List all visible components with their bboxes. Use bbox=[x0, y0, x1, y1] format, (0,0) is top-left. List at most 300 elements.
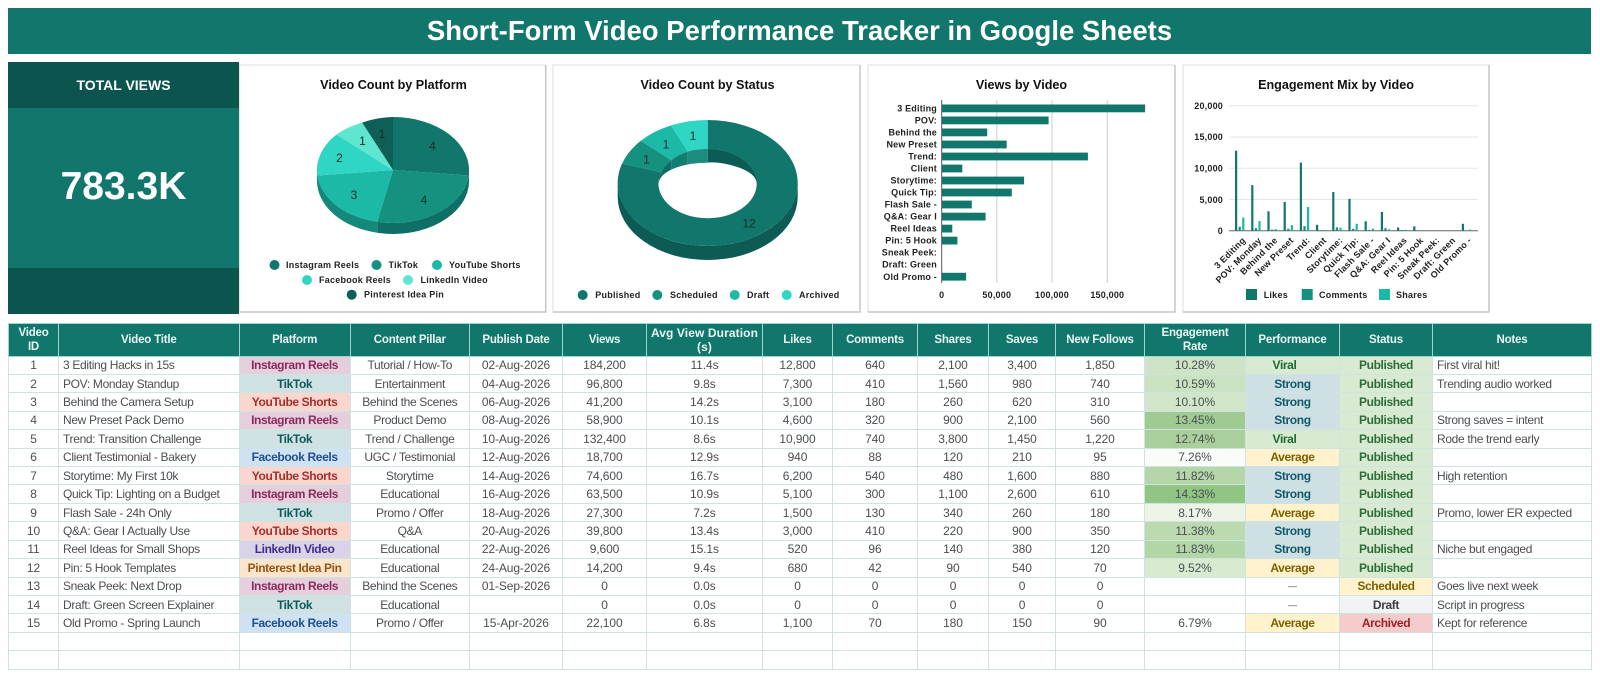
row 3: 06-Aug-2026 bbox=[482, 395, 550, 409]
row 2: 04-Aug-2026 bbox=[482, 377, 550, 391]
row 6: UGC / Testimonial bbox=[364, 450, 455, 464]
row 3: 260 bbox=[943, 395, 963, 409]
bar chart: views by video: Quick Tip: bbox=[891, 188, 937, 198]
row 7: Storytime: My First 10k bbox=[63, 469, 178, 483]
row 4: 13.45% bbox=[1175, 413, 1215, 427]
table header row: Publish Date bbox=[482, 334, 550, 346]
row 14: 14 bbox=[27, 598, 40, 612]
legend: status bbox=[578, 290, 840, 300]
table header row: Comments bbox=[846, 334, 904, 346]
row 15: 15 bbox=[27, 616, 40, 630]
row 2: Published bbox=[1359, 377, 1413, 391]
row 2: 980 bbox=[1012, 377, 1032, 391]
donut chart: status: 1 bbox=[663, 138, 670, 152]
pie chart: platform: 3 bbox=[351, 188, 358, 202]
row 5: 8.6s bbox=[693, 432, 716, 446]
row 10: 410 bbox=[865, 524, 885, 538]
row 12: 24-Aug-2026 bbox=[482, 561, 550, 575]
row 13: Scheduled bbox=[1357, 579, 1415, 593]
legend: engagement: Shares bbox=[1396, 290, 1428, 300]
row 2: 9.8s bbox=[693, 377, 716, 391]
row 6: 7.26% bbox=[1178, 450, 1212, 464]
row 10: Published bbox=[1359, 524, 1413, 538]
row 12: 12 bbox=[27, 561, 40, 575]
row 15: Average bbox=[1270, 616, 1315, 630]
bar chart: views by video: New Preset bbox=[886, 140, 937, 150]
row 3: Strong bbox=[1274, 395, 1311, 409]
row 9: Published bbox=[1359, 506, 1413, 520]
row 5: 1,220 bbox=[1085, 432, 1115, 446]
row 11: 11.83% bbox=[1175, 542, 1215, 556]
column chart: engagement mix: 3 Editing bbox=[1212, 235, 1247, 271]
row 13: 0 bbox=[794, 579, 801, 593]
row 6: 18,700 bbox=[586, 450, 623, 464]
donut chart: status bbox=[618, 120, 798, 260]
row 14: 0 bbox=[1097, 598, 1103, 612]
row 8: 2,600 bbox=[1007, 487, 1037, 501]
bar chart: views by video: Reel Ideas bbox=[890, 224, 937, 234]
legend: status: Scheduled bbox=[670, 290, 718, 300]
row 1: Tutorial / How-To bbox=[367, 358, 452, 372]
row 7: 540 bbox=[865, 469, 885, 483]
row 9: 9 bbox=[30, 506, 37, 520]
legend: platform: Facebook Reels bbox=[319, 275, 391, 285]
row 6: 88 bbox=[868, 450, 882, 464]
row 12: Published bbox=[1359, 561, 1413, 575]
table header row: Content Pillar bbox=[374, 334, 446, 346]
column chart: engagement mix: 20,000 bbox=[1194, 101, 1223, 111]
row 9: 7.2s bbox=[693, 506, 716, 520]
row 11: 120 bbox=[1090, 542, 1110, 556]
donut chart: status: 1 bbox=[690, 129, 697, 143]
row 6: Published bbox=[1359, 450, 1413, 464]
row 15: 1,100 bbox=[783, 616, 812, 630]
row 8: 14.33% bbox=[1175, 487, 1215, 501]
table header row: Platform bbox=[272, 334, 317, 346]
row 8: 8 bbox=[30, 487, 37, 501]
row 1: 3,400 bbox=[1007, 358, 1037, 372]
table header row: Video bbox=[18, 326, 49, 338]
chart title: engagement: Engagement Mix by Video bbox=[1258, 78, 1414, 92]
row 4: 08-Aug-2026 bbox=[482, 413, 550, 427]
table header row: Avg View Duration bbox=[651, 326, 758, 340]
row 14: 0 bbox=[601, 598, 608, 612]
row 5: 740 bbox=[865, 432, 885, 446]
legend: engagement: Likes bbox=[1264, 290, 1288, 300]
legend: platform: Instagram Reels bbox=[286, 260, 359, 270]
legend: engagement bbox=[1246, 289, 1428, 300]
row 1: 1 bbox=[30, 358, 37, 372]
row 10: Strong bbox=[1274, 524, 1311, 538]
row 9 bbox=[30, 504, 1572, 521]
row 7: 7 bbox=[30, 469, 37, 483]
row 7: 880 bbox=[1090, 469, 1110, 483]
donut chart: status: 12 bbox=[742, 216, 756, 230]
row 12: 90 bbox=[946, 561, 960, 575]
legend: status: Draft bbox=[747, 290, 769, 300]
row 11: Strong bbox=[1274, 542, 1311, 556]
row 4: Strong bbox=[1274, 413, 1311, 427]
panel: video count by status bbox=[552, 64, 861, 313]
row 14: Script in progress bbox=[1437, 598, 1524, 612]
row 15: Archived bbox=[1362, 616, 1410, 630]
legend: platform: LinkedIn Video bbox=[420, 275, 488, 285]
row 8: Educational bbox=[380, 487, 439, 501]
bar chart: views by video: 3 Editing bbox=[897, 104, 937, 114]
row 9: TikTok bbox=[277, 506, 312, 520]
row 15: 70 bbox=[868, 616, 882, 630]
row 10: Q&A bbox=[398, 524, 422, 538]
row 3: 310 bbox=[1090, 395, 1110, 409]
row 5: 10,900 bbox=[779, 432, 816, 446]
column chart: engagement mix: POV: Monday bbox=[1214, 235, 1263, 285]
row 2: 96,800 bbox=[586, 377, 623, 391]
row 8: Quick Tip: Lighting on a Budget bbox=[63, 487, 220, 501]
table header row: Performance bbox=[1258, 334, 1327, 346]
row 11: Reel Ideas for Small Shops bbox=[63, 542, 200, 556]
bar chart: views by video: 50,000 bbox=[982, 290, 1011, 300]
column chart: engagement mix: New Preset bbox=[1253, 235, 1295, 278]
pie chart: platform: 4 bbox=[421, 193, 428, 207]
legend: platform: YouTube Shorts bbox=[449, 260, 521, 270]
row 1 bbox=[30, 357, 1500, 374]
row 8: Strong bbox=[1274, 487, 1311, 501]
panel: total views KPI bbox=[8, 62, 239, 314]
row 7: Strong bbox=[1274, 469, 1311, 483]
row 15: Kept for reference bbox=[1437, 616, 1527, 630]
row 7: 74,600 bbox=[586, 469, 623, 483]
row 10: 220 bbox=[943, 524, 963, 538]
row 6: Facebook Reels bbox=[252, 450, 338, 464]
column chart: engagement mix: Old Promo - bbox=[1428, 235, 1473, 280]
column chart: engagement mix: 15,000 bbox=[1194, 132, 1223, 142]
row 9: Flash Sale - 24h Only bbox=[63, 506, 171, 520]
row 5: 10-Aug-2026 bbox=[482, 432, 550, 446]
row 13: 0 bbox=[1097, 579, 1103, 593]
row 3: Behind the Camera Setup bbox=[63, 395, 194, 409]
row 13: 01-Sep-2026 bbox=[482, 579, 550, 593]
row 13: Instagram Reels bbox=[251, 579, 338, 593]
row 4: 560 bbox=[1090, 413, 1110, 427]
row 3: YouTube Shorts bbox=[252, 395, 337, 409]
row 9: Average bbox=[1270, 506, 1315, 520]
row 3: 10.10% bbox=[1175, 395, 1215, 409]
row 7: High retention bbox=[1437, 469, 1507, 483]
row 6: Average bbox=[1270, 450, 1315, 464]
row 4: Published bbox=[1359, 413, 1413, 427]
row 10: 13.4s bbox=[690, 524, 719, 538]
bar chart: views by video: Draft: Green bbox=[882, 260, 937, 270]
row 5 bbox=[30, 430, 1540, 448]
row 9: 1,500 bbox=[783, 506, 812, 520]
row 6: 940 bbox=[788, 450, 807, 464]
bar chart: views by video: Behind the bbox=[888, 128, 937, 138]
bar chart: views by video: 0 bbox=[939, 290, 944, 300]
bar chart: views by video: Storytime: bbox=[890, 176, 937, 186]
column chart: engagement mix bbox=[1194, 101, 1478, 285]
row 12: 9.52% bbox=[1178, 561, 1212, 575]
row 13 bbox=[27, 578, 1538, 595]
row 9: 180 bbox=[1090, 506, 1110, 520]
bar chart: views by video: Pin: 5 Hook bbox=[885, 236, 938, 246]
bar chart: views by video: Q&A: Gear I bbox=[884, 212, 937, 222]
table header row: Video Title bbox=[121, 334, 177, 346]
row 5: TikTok bbox=[277, 432, 312, 446]
row 9: Promo / Offer bbox=[376, 506, 444, 520]
row 7: 6,200 bbox=[783, 469, 812, 483]
row 1: 02-Aug-2026 bbox=[482, 358, 550, 372]
row 7 bbox=[30, 467, 1507, 484]
column chart: engagement mix: Draft: Green bbox=[1412, 235, 1457, 281]
row 13: Sneak Peek: Next Drop bbox=[63, 579, 181, 593]
row 5: 5 bbox=[30, 432, 37, 446]
empty row 16 bbox=[8, 632, 1591, 651]
row 1: Instagram Reels bbox=[251, 358, 338, 372]
row 13: — bbox=[1288, 581, 1297, 591]
column chart: engagement mix: Client bbox=[1303, 235, 1328, 261]
row 8 bbox=[30, 485, 1432, 503]
row 6: 210 bbox=[1012, 450, 1032, 464]
row 15: 15-Apr-2026 bbox=[483, 616, 549, 630]
row 6: 12-Aug-2026 bbox=[482, 450, 550, 464]
row 12: 70 bbox=[1093, 561, 1107, 575]
row 3: 3,100 bbox=[783, 395, 812, 409]
row 7: 14-Aug-2026 bbox=[482, 469, 550, 483]
row 8: Published bbox=[1359, 487, 1413, 501]
legend: status: Published bbox=[595, 290, 641, 300]
row 6: 120 bbox=[943, 450, 963, 464]
bar chart: views by video: Old Promo - bbox=[883, 272, 937, 282]
row 5: Trend: Transition Challenge bbox=[63, 432, 201, 446]
row 14: Educational bbox=[380, 598, 439, 612]
row 3: 41,200 bbox=[586, 395, 623, 409]
row 5: Published bbox=[1359, 432, 1413, 446]
KPI footer band bbox=[8, 268, 239, 314]
legend: platform: Pinterest Idea Pin bbox=[364, 290, 444, 300]
row 11: 380 bbox=[1012, 542, 1032, 556]
row 5: 12.74% bbox=[1175, 432, 1215, 446]
row 6 bbox=[30, 449, 1432, 466]
row 2: 7,300 bbox=[783, 377, 812, 391]
row 3: 180 bbox=[865, 395, 885, 409]
pie chart: platform: 2 bbox=[336, 151, 343, 165]
row 12: 42 bbox=[868, 561, 882, 575]
row 15: 150 bbox=[1012, 616, 1032, 630]
row 1: Viral bbox=[1273, 358, 1296, 372]
column chart: engagement mix: 10,000 bbox=[1194, 164, 1223, 174]
empty row 17 bbox=[8, 651, 1591, 669]
pie chart: platform: 1 bbox=[359, 134, 366, 148]
row 4: 58,900 bbox=[586, 413, 623, 427]
row 8: 1,100 bbox=[938, 487, 968, 501]
row 4: 2,100 bbox=[1007, 413, 1037, 427]
row 4: 4 bbox=[30, 413, 37, 427]
row 7: Published bbox=[1359, 469, 1413, 483]
row 12: Pinterest Idea Pin bbox=[248, 561, 342, 575]
row 14: Draft: Green Screen Explainer bbox=[63, 598, 214, 612]
row 2: POV: Monday Standup bbox=[63, 377, 179, 391]
row 5: 132,400 bbox=[583, 432, 626, 446]
row 13: 0 bbox=[1019, 579, 1025, 593]
row 9: 18-Aug-2026 bbox=[482, 506, 550, 520]
table header row: Views bbox=[589, 334, 620, 346]
legend: platform bbox=[270, 260, 521, 300]
KPI value: 783.3K bbox=[61, 165, 186, 208]
row 13: 13 bbox=[27, 579, 40, 593]
row 1: Published bbox=[1359, 358, 1413, 372]
title bbox=[8, 8, 1591, 54]
row 14: 0 bbox=[1019, 598, 1025, 612]
row 10: 11.38% bbox=[1175, 524, 1215, 538]
row 4: 320 bbox=[865, 413, 885, 427]
row 14: Draft bbox=[1373, 598, 1399, 612]
row 7: 1,600 bbox=[1007, 469, 1037, 483]
column chart: engagement mix: Reel Ideas bbox=[1369, 235, 1409, 275]
row 4: Instagram Reels bbox=[251, 413, 338, 427]
bar chart: views by video: Trend: bbox=[908, 152, 937, 162]
row 14: — bbox=[1288, 600, 1297, 610]
row 1: 1,850 bbox=[1085, 358, 1115, 372]
row 12 bbox=[27, 559, 1432, 577]
KPI label bbox=[8, 62, 239, 108]
row 12: Average bbox=[1270, 561, 1315, 575]
row 15: 6.8s bbox=[693, 616, 716, 630]
donut chart: status: 1 bbox=[643, 152, 650, 166]
row 13: 0 bbox=[872, 579, 878, 593]
row 3: Published bbox=[1359, 395, 1413, 409]
legend: status: Archived bbox=[799, 290, 840, 300]
row 3: Behind the Scenes bbox=[362, 395, 457, 409]
row 10: 900 bbox=[1012, 524, 1032, 538]
row 12: 680 bbox=[788, 561, 807, 575]
row 1: First viral hit! bbox=[1437, 358, 1500, 372]
row 7: YouTube Shorts bbox=[252, 469, 337, 483]
row 14: 0 bbox=[872, 598, 878, 612]
row 11: 15.1s bbox=[690, 542, 719, 556]
row 14: TikTok bbox=[277, 598, 312, 612]
row 1: 3 Editing Hacks in 15s bbox=[63, 358, 174, 372]
bar chart: views by video: Flash Sale - bbox=[885, 200, 937, 210]
row 11: 96 bbox=[868, 542, 882, 556]
row 15: Old Promo - Spring Launch bbox=[63, 616, 200, 630]
row 4: Strong saves = intent bbox=[1437, 413, 1543, 427]
legend: platform: TikTok bbox=[388, 260, 419, 270]
table header row: ID bbox=[28, 340, 39, 352]
row 4: New Preset Pack Demo bbox=[63, 413, 184, 427]
row 11: 520 bbox=[788, 542, 807, 556]
row 14: 0.0s bbox=[693, 598, 716, 612]
row 1: 12,800 bbox=[779, 358, 816, 372]
row 9: 260 bbox=[1012, 506, 1032, 520]
row 14 bbox=[27, 596, 1524, 613]
KPI label: TOTAL VIEWS bbox=[76, 77, 171, 93]
row 9: 340 bbox=[943, 506, 963, 520]
row 15: 22,100 bbox=[586, 616, 623, 630]
column chart: engagement mix: Behind the bbox=[1238, 235, 1279, 277]
bar chart: views by video bbox=[882, 100, 1145, 300]
row 10: 10 bbox=[27, 524, 40, 538]
row 8: 5,100 bbox=[783, 487, 812, 501]
row 3 bbox=[30, 393, 1432, 411]
table header row: (s) bbox=[697, 340, 712, 354]
panel: views by video bbox=[868, 64, 1176, 313]
table header row: Shares bbox=[934, 334, 972, 346]
table header row: Saves bbox=[1006, 334, 1038, 346]
row 4: 4,600 bbox=[783, 413, 812, 427]
row 2: 740 bbox=[1090, 377, 1110, 391]
row 3: 3 bbox=[30, 395, 37, 409]
table header row: Notes bbox=[1496, 334, 1527, 346]
row 8: 610 bbox=[1090, 487, 1110, 501]
row 13: 0 bbox=[601, 579, 608, 593]
row 6: 95 bbox=[1093, 450, 1107, 464]
bar chart: views by video: 100,000 bbox=[1035, 290, 1069, 300]
row 11: 11 bbox=[27, 542, 40, 556]
table header row: Likes bbox=[783, 334, 812, 346]
row 2: 1,560 bbox=[938, 377, 968, 391]
row 10 bbox=[27, 522, 1432, 540]
row 11: 9,600 bbox=[590, 542, 619, 556]
row 7: 16.7s bbox=[690, 469, 719, 483]
table header row: New Follows bbox=[1066, 334, 1134, 346]
row 3: 14.2s bbox=[690, 395, 719, 409]
row 5: Viral bbox=[1273, 432, 1296, 446]
column chart: engagement mix: Quick Tip: bbox=[1321, 235, 1360, 275]
pie chart: platform bbox=[317, 117, 469, 234]
chart title: views: Views by Video bbox=[976, 78, 1067, 92]
row 10: 3,000 bbox=[783, 524, 812, 538]
row 11: 140 bbox=[943, 542, 963, 556]
title: Short-Form Video Performance Tracker in Google Sheets bbox=[427, 15, 1172, 46]
row 8: 16-Aug-2026 bbox=[482, 487, 550, 501]
row 15 bbox=[27, 614, 1527, 632]
row 7: 11.82% bbox=[1175, 469, 1215, 483]
row 2: TikTok bbox=[277, 377, 312, 391]
bar chart: views by video: Sneak Peek: bbox=[882, 248, 937, 258]
row 13: 0 bbox=[950, 579, 956, 593]
row 15: 6.79% bbox=[1178, 616, 1212, 630]
row 7: 480 bbox=[943, 469, 963, 483]
row 15: 90 bbox=[1093, 616, 1107, 630]
row 5: Trend / Challenge bbox=[365, 432, 454, 446]
row 10: YouTube Shorts bbox=[252, 524, 337, 538]
column chart: engagement mix: 0 bbox=[1218, 226, 1223, 236]
bar chart: views by video: POV: bbox=[915, 116, 937, 126]
row 11: Educational bbox=[380, 542, 439, 556]
row 1: 10.28% bbox=[1175, 358, 1215, 372]
row 12: Pin: 5 Hook Templates bbox=[63, 561, 176, 575]
row 11: 22-Aug-2026 bbox=[482, 542, 550, 556]
row 9: 27,300 bbox=[586, 506, 623, 520]
row 8: 63,500 bbox=[586, 487, 623, 501]
row 7: Storytime bbox=[386, 469, 434, 483]
row 12: 9.4s bbox=[693, 561, 716, 575]
row 11: Niche but engaged bbox=[1437, 542, 1532, 556]
row 15: 180 bbox=[943, 616, 963, 630]
column chart: engagement mix: Pin: 5 Hook bbox=[1382, 235, 1426, 279]
row 2 bbox=[30, 375, 1552, 392]
panel: engagement mix by video bbox=[1182, 64, 1490, 313]
table header row bbox=[9, 324, 1591, 632]
row 11: Published bbox=[1359, 542, 1413, 556]
column chart: engagement mix: Sneak Peek: bbox=[1395, 235, 1441, 281]
row 5: 1,450 bbox=[1007, 432, 1037, 446]
row 4 bbox=[30, 412, 1544, 429]
row 6: 6 bbox=[30, 450, 37, 464]
bar chart: views by video: Client bbox=[911, 164, 937, 174]
row 8: 10.9s bbox=[690, 487, 719, 501]
row 8: Instagram Reels bbox=[251, 487, 338, 501]
